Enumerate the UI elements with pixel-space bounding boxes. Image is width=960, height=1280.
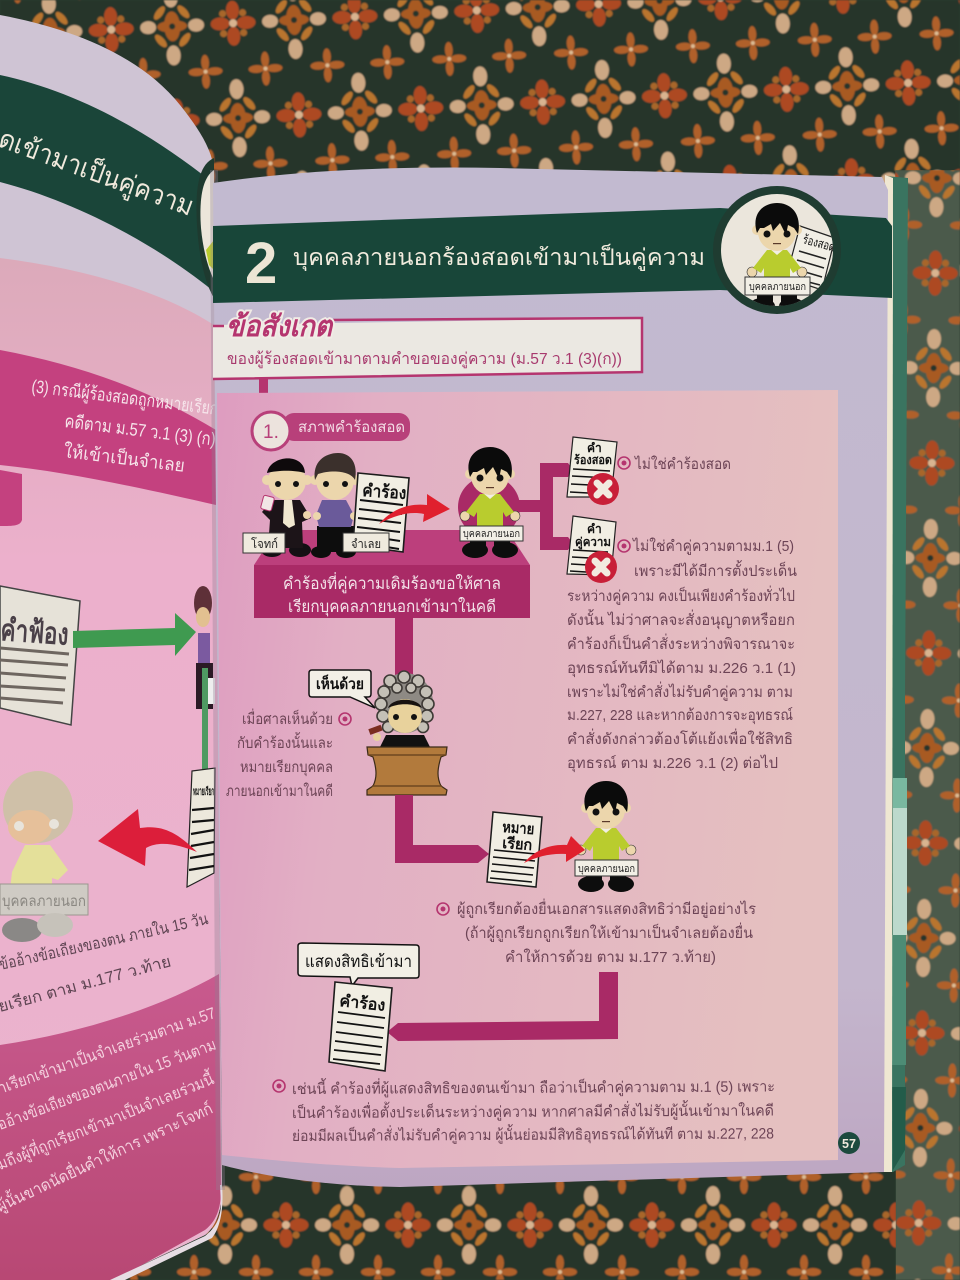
- platform: [254, 530, 530, 618]
- left page document: complaint: [0, 586, 80, 725]
- not intervention document: คำ: [587, 441, 602, 455]
- left page green title band: [0, 75, 212, 290]
- petition document: คำร้อง: [362, 481, 407, 503]
- left page partial character medallion: [196, 158, 214, 298]
- note stem: [259, 378, 268, 393]
- fabric background: bottom: [100, 1150, 896, 1280]
- character medallion: บุคคลภายนอก: [749, 282, 806, 293]
- green title band: [213, 208, 892, 303]
- not intervention text: ไม่ใช่คำร้องสอด: [634, 455, 731, 473]
- bottom band text: าเรียกเข้ามาเป็นจำเลยร่วมตาม ม.57: [0, 1002, 218, 1098]
- section number: 2: [245, 231, 277, 296]
- vertical connector: [395, 618, 413, 688]
- plaintiff label: โจทก์: [251, 537, 278, 551]
- book cover edge: [880, 175, 908, 1172]
- agree speech bubble: [309, 670, 375, 708]
- character medallion: ร้องสอด: [801, 232, 837, 254]
- left page caption: ข้ออ้างข้อเถียงของตน ภายใน 15 วัน: [0, 909, 210, 974]
- right book page: [213, 168, 892, 1187]
- bracket connector: [518, 463, 573, 550]
- not pleading explanation text: อุทธรณ์ ตาม ม.226 ว.1 (2) ต่อไป: [567, 754, 778, 773]
- not pleading document: คู่ความ: [575, 535, 611, 550]
- conclusion text: เป็นคำร้องเพื่อตั้งประเด็นระหว่างคู่ความ หากศาลมีคำสั่งไม่รับผู้นั้นเข้ามาในคดี: [292, 1099, 774, 1122]
- instruction text: (ถ้าผู้ถูกเรียกถูกเรียกให้เข้ามาเป็นจำเลยต้องยื่น: [465, 922, 753, 942]
- left page caption: [0, 909, 210, 1016]
- not pleading explanation text: เพราะไม่ใช่คำสั่งไม่รับคำคู่ความ ตาม: [567, 681, 793, 701]
- left page foil person: บุคคลภายนอก: [2, 893, 86, 911]
- conclusion text: [273, 1075, 775, 1146]
- step badge: สภาพคำร้องสอด: [298, 419, 405, 436]
- agree speech bubble: เห็นด้วย: [316, 674, 364, 693]
- outsider figure receiving summons: [575, 781, 638, 892]
- note box: [213, 311, 642, 379]
- not pleading explanation text: อุทธรณ์ทันทีมิได้ตาม ม.226 ว.1 (1): [567, 659, 796, 678]
- not pleading explanation text: [567, 537, 797, 773]
- left page title text: ดเข้ามาเป็นคู่ความ: [0, 121, 199, 223]
- summons document: เรียก: [502, 835, 533, 854]
- defendant label: [343, 533, 389, 552]
- pink panel: [217, 390, 838, 1168]
- not pleading explanation text: ดังนั้น ไม่ว่าศาลจะสั่งอนุญาตหรือยก: [567, 609, 795, 630]
- page number: [838, 1132, 860, 1154]
- connector to petition: [387, 972, 618, 1041]
- petition document: คำร้อง: [339, 992, 386, 1015]
- step badge: [252, 412, 410, 450]
- left page green connector: [202, 668, 208, 770]
- judge text: หมายเรียกบุคคล: [240, 759, 333, 777]
- not intervention document: [567, 437, 619, 505]
- connector to summons: [395, 795, 489, 863]
- red arrow to outsider: [524, 836, 585, 863]
- plaintiff figure: [243, 458, 312, 557]
- not pleading explanation text: คำสั่งดังกล่าวต้องโต้แย้งเพื่อใช้สิทธิ: [567, 728, 793, 748]
- fabric background: right side: [895, 170, 960, 1280]
- left page summons document: [187, 768, 215, 887]
- left page defendant figure: [194, 586, 215, 709]
- petition document: [329, 982, 392, 1071]
- item 3 text: (3) กรณีผู้ร้องสอดถูกหมายเรียก: [30, 376, 220, 420]
- item 3 text: คดีตาม ม.57 ว.1 (3) (ก): [64, 411, 217, 449]
- bottom band text: [0, 1002, 219, 1217]
- not pleading explanation text: ไม่ใช่คำคู่ความตามม.1 (5): [632, 537, 794, 555]
- defendant figure: [310, 453, 360, 558]
- book spine shadow: [210, 170, 225, 1190]
- character medallion: [713, 186, 841, 314]
- left page green arrow: [73, 613, 196, 656]
- judge text: กับคำร้องนั้นและ: [237, 732, 333, 752]
- left page white edge sliver: [110, 1185, 223, 1280]
- conclusion text: ย่อมมีผลเป็นคำสั่งไม่รับคำคู่ความ ผู้นั้นย่อมมีสิทธิอุทธรณ์ได้ทันที ตาม ม.227, 228: [292, 1122, 774, 1146]
- summons document: [487, 812, 542, 887]
- not pleading explanation text: ระหว่างคู่ความ คงเป็นเพียงคำร้องทั่วไป: [567, 585, 795, 605]
- left page caption: ยเรียก ตาม ม.177 ว.ท้าย: [0, 952, 173, 1016]
- bottom band text: ออ้างข้อเถียงของตนภายใน 15 วันตาม: [0, 1035, 219, 1134]
- outsider figure with circle: [458, 447, 523, 558]
- left book page: หมายเรียก: [193, 785, 214, 798]
- item 3 text: ให้เข้าเป็นจำเลย: [63, 439, 186, 476]
- show rights speech bubble: แสดงสิทธิเข้ามา: [305, 952, 412, 971]
- left page magenta tab: [0, 470, 22, 526]
- show rights speech bubble: [298, 943, 419, 986]
- judge text: [226, 708, 351, 800]
- platform: เรียกบุคคลภายนอกเข้ามาในคดี: [288, 597, 496, 617]
- platform text: คำร้องที่คู่ความเดิมร้องขอให้ศาล: [283, 572, 501, 594]
- left page red arrow: [98, 809, 197, 866]
- section title: บุคคลภายนอกร้องสอดเข้ามาเป็นคู่ความ: [293, 242, 705, 271]
- defendant label: จำเลย: [351, 537, 381, 551]
- instruction text: [437, 898, 756, 966]
- item 3 text: [30, 376, 220, 476]
- page number: 57: [842, 1137, 856, 1151]
- not pleading explanation text: ม.227, 228 และหากต้องการจะอุทธรณ์: [567, 707, 793, 725]
- instruction text: ผู้ถูกเรียกต้องยื่นเอกสารแสดงสิทธิว่ามีอยู่อย่างไร: [457, 898, 756, 918]
- note heading: ข้อสังเกต: [226, 311, 334, 343]
- note subheading: ของผู้ร้องสอดเข้ามาตามคำขอของคู่ความ (ม.57 ว.1 (3)(ก)): [227, 350, 622, 369]
- step badge: 1.: [263, 422, 279, 443]
- outsider figure receiving summons: บุคคลภายนอก: [578, 864, 635, 875]
- judge figure with podium: [367, 671, 447, 795]
- judge text: ภายนอกเข้ามาในคดี: [226, 782, 333, 800]
- red arrow to outsider: [379, 494, 450, 524]
- left page document: complaint: คำฟ้อง: [0, 614, 70, 652]
- conclusion text: เช่นนี้ คำร้องที่ผู้แสดงสิทธิของตนเข้ามา ถือว่าเป็นคำคู่ความตาม ม.1 (5) เพราะ: [292, 1075, 775, 1098]
- podium: [367, 747, 447, 795]
- petition document: [353, 473, 409, 552]
- summons document: หมาย: [502, 819, 535, 838]
- not pleading explanation text: เพราะมีได้มีการตั้งประเด็น: [634, 560, 797, 580]
- not pleading document: [567, 516, 617, 583]
- left page bottom magenta band: [0, 974, 221, 1280]
- not intervention document: ร้องสอด: [574, 453, 612, 467]
- not pleading explanation text: คำร้องก็เป็นคำสั่งระหว่างพิจารณาจะ: [567, 633, 795, 653]
- outsider figure with circle: บุคคลภายนอก: [463, 529, 520, 540]
- judge text: เมื่อศาลเห็นด้วย: [242, 708, 333, 728]
- bottom band text: มถึงผู้ที่ถูกเรียกเข้ามาเป็นจำเลยร่วมนี้: [0, 1067, 217, 1175]
- bottom band text: ผู้นั้นขาดนัดยื่นคำให้การ เพราะโจทก์: [0, 1097, 216, 1217]
- fabric background: top: [0, 0, 960, 330]
- not pleading document: คำ: [587, 522, 602, 536]
- left page foil person: [0, 771, 88, 942]
- left page magenta band with item 3: [0, 350, 220, 505]
- left book page: [0, 15, 223, 1280]
- instruction text: คำให้การด้วย ตาม ม.177 ว.ท้าย): [505, 948, 716, 966]
